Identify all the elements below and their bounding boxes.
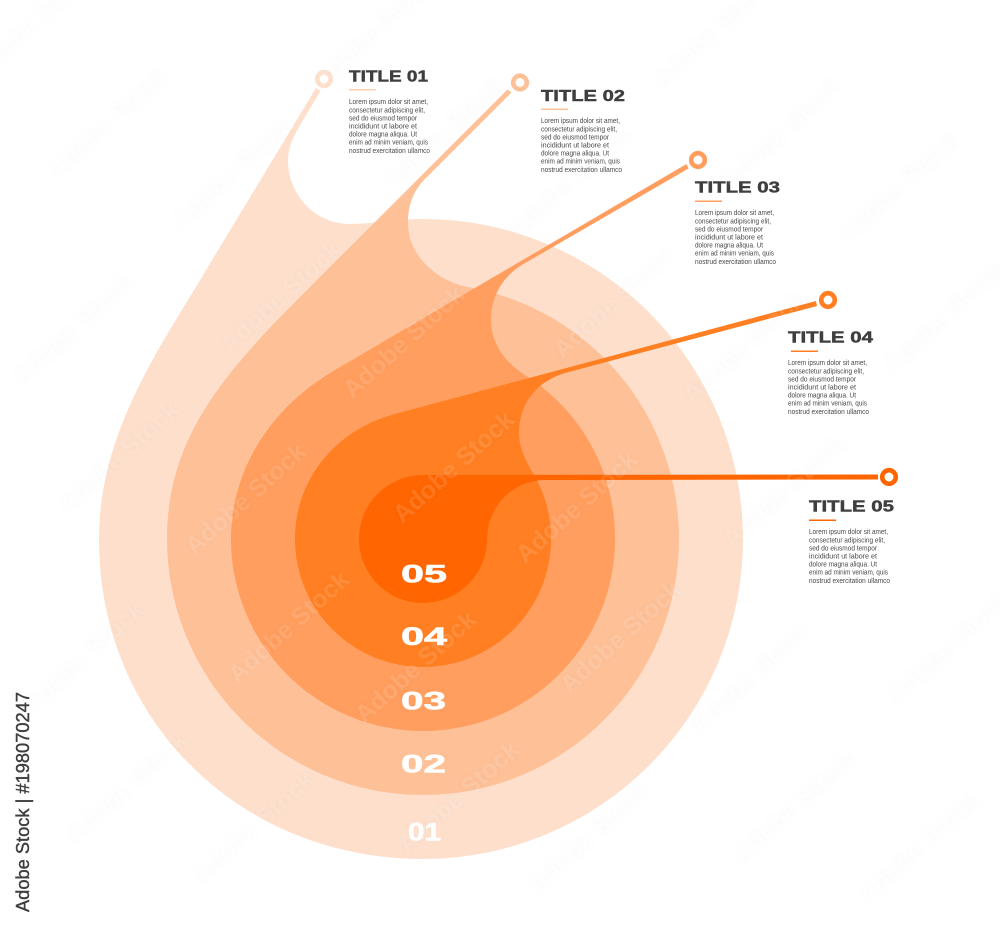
body text 04: sed do eiusmod tempor (788, 376, 857, 383)
watermark pattern: Adobe Stock (678, 285, 810, 409)
heading 01: TITLE 01 (349, 68, 428, 86)
watermark pattern: Adobe Stock (378, 70, 510, 194)
body text 05: sed do eiusmod tempor (809, 545, 878, 552)
number 05: 05 (401, 560, 447, 588)
panel: title 03 (695, 180, 780, 266)
watermark pattern: Adobe Stock (716, 70, 848, 194)
body text 03: dolore magna aliqua. Ut (695, 243, 763, 250)
watermark pattern: Adobe Stock (718, 430, 850, 554)
body text 05: incididunt ut labore et (809, 554, 877, 560)
heading 05: TITLE 05 (809, 498, 894, 516)
body text 04: Lorem ipsum dolor sit amet, (788, 360, 867, 367)
marker ring 01 (317, 72, 331, 86)
body text 01: nostrud exercitation ullamco (349, 148, 430, 155)
body text 04: nostrud exercitation ullamco (788, 409, 869, 416)
marker ring 04 (821, 293, 835, 307)
watermark pattern: Adobe Stock (511, 445, 643, 569)
body text 02: incididunt ut labore et (541, 142, 609, 150)
marker ring 03 (691, 153, 705, 167)
heading 03: TITLE 03 (695, 180, 780, 196)
watermark pattern: Adobe Stock (338, 280, 470, 404)
body text 01: Lorem ipsum dolor sit amet, (349, 99, 428, 106)
body text 04: consectetur adipiscing elit, (788, 368, 864, 375)
body text 01: dolore magna aliqua. Ut (349, 132, 417, 139)
body text 02 (541, 118, 622, 174)
body text 03 (695, 210, 776, 266)
body text 03: consectetur adipiscing elit, (695, 218, 771, 225)
underline 03 (695, 200, 722, 202)
watermark pattern: Adobe Stock (685, 615, 817, 739)
body text 02: consectetur adipiscing elit, (541, 126, 617, 133)
underline 02 (541, 108, 568, 110)
number 03: 03 (401, 688, 446, 716)
body text 02: nostrud exercitation ullamco (541, 167, 622, 174)
watermark pattern: Adobe Stock (350, 605, 482, 729)
panel: title 02 (541, 88, 625, 174)
drop 01 (99, 88, 743, 859)
heading 04: TITLE 04 (788, 330, 873, 346)
watermark pattern: Adobe Stock (18, 595, 150, 719)
drop 03 (231, 164, 688, 731)
watermark pattern: Adobe Stock (555, 575, 687, 699)
body text 04: dolore magna aliqua. Ut (788, 393, 856, 400)
marker ring 05 (882, 470, 896, 484)
body text 03: sed do eiusmod tempor (695, 226, 764, 233)
watermark pattern: Adobe Stock (168, 110, 300, 234)
body text 01: consectetur adipiscing elit, (349, 107, 425, 114)
watermark pattern: Adobe Stock (180, 437, 312, 561)
body text 04: incididunt ut labore et (788, 384, 856, 392)
watermark pattern: Adobe Stock (61, 725, 193, 849)
watermark pattern: Adobe Stock (223, 565, 355, 689)
drop 04 (295, 301, 817, 667)
body text 03: enim ad minim veniam, quis (695, 251, 775, 258)
body text 05: enim ad minim veniam, quis (809, 570, 889, 577)
watermark pattern: Adobe Stock (188, 765, 320, 889)
underline 04 (791, 350, 818, 352)
body text 01: sed do eiusmod tempor (349, 115, 418, 122)
body text 05 (809, 529, 890, 585)
watermark pattern: Adobe Stock (853, 785, 985, 909)
body text 01: incididunt ut labore et (349, 124, 417, 130)
watermark pattern: Adobe Stock (523, 775, 655, 899)
watermark pattern: Adobe Stock (548, 240, 680, 364)
drop 05 (359, 474, 878, 603)
number 04: 04 (401, 623, 447, 651)
body text 03: incididunt ut labore et (695, 234, 763, 242)
body text 03: nostrud exercitation ullamco (695, 259, 776, 266)
underline 05 (809, 520, 836, 521)
drop 02 (167, 90, 679, 795)
watermark pattern: Adobe Stock (728, 745, 860, 869)
body text 01 (349, 99, 430, 155)
body text 02: dolore magna aliqua. Ut (541, 151, 609, 158)
body text 05: consectetur adipiscing elit, (809, 537, 885, 544)
body text 05: dolore magna aliqua. Ut (809, 562, 877, 569)
marker ring 02 (513, 76, 527, 89)
body text 05: nostrud exercitation ullamco (809, 578, 890, 585)
body text 05: Lorem ipsum dolor sit amet, (809, 529, 888, 536)
watermark pattern: Adobe Stock (53, 395, 185, 519)
panel: title 04 (788, 330, 873, 416)
body text 03: Lorem ipsum dolor sit amet, (695, 210, 774, 217)
body text 01: enim ad minim veniam, quis (349, 140, 429, 147)
underline 01 (349, 89, 376, 90)
watermark pattern: Adobe Stock (43, 60, 175, 184)
panel: title 05 (809, 498, 894, 585)
number 02: 02 (401, 750, 446, 778)
watermark pattern: Adobe Stock (215, 235, 347, 359)
watermark pattern: Adobe Stock (393, 735, 525, 859)
heading 02: TITLE 02 (541, 88, 625, 105)
body text 02: Lorem ipsum dolor sit amet, (541, 118, 620, 125)
watermark pattern: Adobe Stock (503, 120, 635, 244)
stock image id: Adobe Stock | #198070247 (12, 692, 33, 912)
body text 04: enim ad minim veniam, quis (788, 401, 868, 408)
body text 02: sed do eiusmod tempor (541, 134, 610, 141)
number 01: 01 (408, 818, 441, 846)
watermark pattern: Adobe Stock (8, 267, 140, 391)
body text 02: enim ad minim veniam, quis (541, 159, 621, 166)
body text 04 (788, 360, 869, 416)
watermark pattern: Adobe Stock (833, 125, 965, 249)
panel: title 01 (349, 68, 430, 155)
watermark pattern: Adobe Stock (388, 405, 520, 529)
